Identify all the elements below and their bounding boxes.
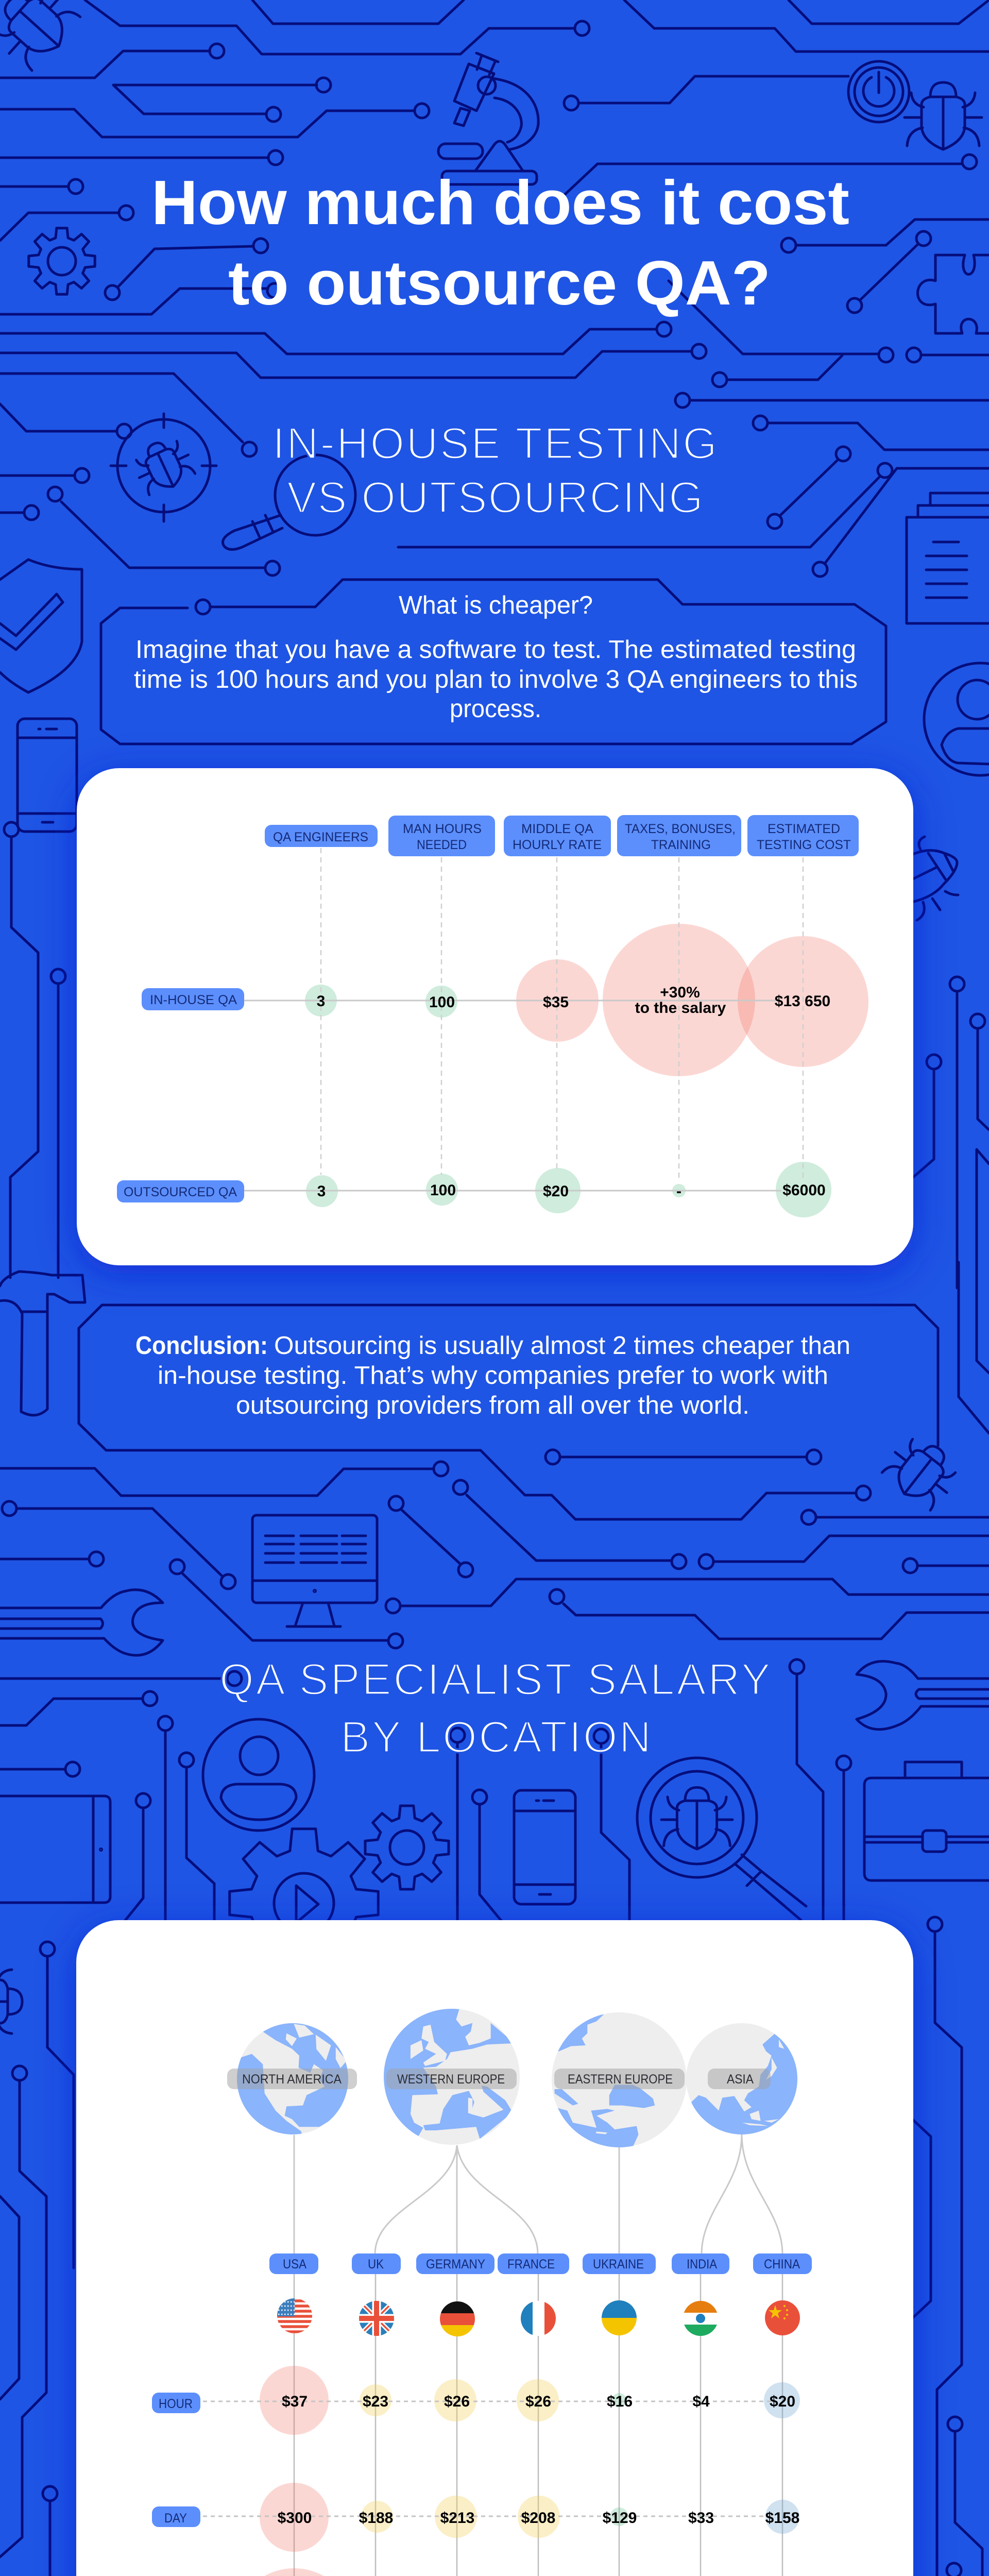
country labels: INDIA xyxy=(687,2257,717,2272)
icon: person right xyxy=(924,663,989,775)
icon: tablet left xyxy=(0,1796,110,1903)
row labels: IN-HOUSE QA xyxy=(150,993,237,1007)
values: day: $129 xyxy=(603,2510,637,2527)
icon: bug top right xyxy=(905,82,982,149)
globe: western europe xyxy=(381,2008,520,2145)
heading: in-house vs outsourcing: IN-HOUSE TESTING xyxy=(272,419,717,468)
values: in-house row: 100 xyxy=(429,994,455,1011)
column headers: QA ENGINEERS xyxy=(273,830,368,844)
flag: usa xyxy=(277,2298,312,2333)
icon: power button xyxy=(848,61,909,122)
icon: shield xyxy=(0,560,82,692)
icon: monitor xyxy=(252,1515,377,1626)
flag: france xyxy=(521,2301,556,2336)
values: day xyxy=(278,2510,799,2527)
column headers: ESTIMATED xyxy=(768,822,840,836)
row labels: hour day week month xyxy=(146,2393,205,2576)
icon: hammer xyxy=(0,1272,85,1415)
icon: magnifier with bug xyxy=(637,1758,806,1920)
values: hour: $20 xyxy=(770,2393,795,2410)
values: outsourced row: $20 xyxy=(543,1183,569,1200)
country labels: UK xyxy=(368,2257,384,2272)
text block: first conclusion: Outsourcing is usually almost 2 times cheaper than xyxy=(274,1332,850,1360)
heading: in-house vs outsourcing: VS OUTSOURCING xyxy=(287,473,703,522)
icon: phone middle xyxy=(514,1790,575,1904)
globe: north america: NORTH AMERICA xyxy=(242,2072,342,2087)
country labels: USA xyxy=(283,2257,306,2272)
text block: what is cheaper: What is cheaper? xyxy=(399,591,593,619)
heading: salary by location: BY LOCATION xyxy=(340,1713,651,1762)
column headers: TRAINING xyxy=(651,838,711,852)
country labels: GERMANY xyxy=(426,2257,485,2272)
panel: testing cost comparison xyxy=(77,768,913,1273)
values: day: $188 xyxy=(359,2510,393,2527)
bubble chart: in-house row xyxy=(305,924,868,1076)
values: outsourced row: - xyxy=(676,1183,681,1200)
values: hour: $26 xyxy=(444,2393,470,2410)
country labels: UKRAINE xyxy=(593,2257,644,2272)
heading: in-house vs outsourcing xyxy=(272,419,717,522)
values: hour: $4 xyxy=(692,2393,710,2410)
flag: china xyxy=(765,2300,800,2335)
row labels: OUTSOURCED QA xyxy=(124,1185,237,1199)
row labels xyxy=(117,988,244,1202)
values: in-house row: to the salary xyxy=(635,999,726,1016)
values: in-house row xyxy=(317,984,830,1016)
dashed row lines xyxy=(203,2401,773,2576)
values: in-house row: $13 650 xyxy=(775,993,830,1010)
icon: microscope xyxy=(438,53,538,184)
text box outline: what is cheaper xyxy=(101,580,886,744)
values: outsourced row xyxy=(317,1182,826,1200)
row labels: hour day week month: DAY xyxy=(164,2511,187,2526)
panel: salary by location xyxy=(76,1920,913,2576)
values: day: $158 xyxy=(765,2510,799,2527)
title: to outsource QA? xyxy=(228,248,771,318)
values: day: $208 xyxy=(521,2510,555,2527)
icon: large gear with play xyxy=(230,1829,378,1977)
icon: magnifier xyxy=(223,455,355,550)
icon: bug right of conclusion xyxy=(878,1429,965,1514)
icon: phone left xyxy=(18,719,77,832)
values: in-house row: +30% xyxy=(660,984,700,1001)
flag: uk xyxy=(359,2301,394,2336)
icon: wrench right xyxy=(857,1661,989,1730)
column headers xyxy=(265,815,859,856)
icon: briefcase xyxy=(864,1762,989,1880)
column headers: TAXES, BONUSES, xyxy=(625,822,736,836)
title: How much does it cost xyxy=(151,167,849,238)
text block: first conclusion: in-house testing. That’s why companies prefer to work with xyxy=(158,1362,828,1389)
values: outsourced row: 3 xyxy=(317,1183,326,1200)
values: outsourced row: $6000 xyxy=(782,1182,826,1199)
icon: small gear xyxy=(365,1806,449,1889)
values: day: $33 xyxy=(688,2510,714,2527)
column headers: TESTING COST xyxy=(757,838,851,852)
flag: germany xyxy=(440,2301,475,2337)
column headers: MAN HOURS xyxy=(403,822,482,836)
values: hour xyxy=(282,2393,795,2410)
country labels: CHINA xyxy=(764,2257,800,2272)
icon: bug top left xyxy=(0,0,84,75)
text block: first conclusion: Conclusion: xyxy=(135,1332,268,1360)
globe: north america xyxy=(227,2020,357,2140)
icon: bug right of card one xyxy=(907,837,958,920)
flag: india xyxy=(683,2301,718,2336)
bubbles: week row xyxy=(233,2568,815,2576)
bubbles: day row xyxy=(260,2483,799,2552)
icon: wrench left xyxy=(0,1590,163,1655)
globe: eastern europe: EASTERN EUROPE xyxy=(568,2072,673,2087)
row labels: hour day week month: HOUR xyxy=(159,2397,193,2411)
icon: gear left xyxy=(29,228,95,294)
heading: salary by location: QA SPECIALIST SALARY xyxy=(219,1655,771,1704)
values: day: $213 xyxy=(440,2510,474,2527)
bubbles: hour row xyxy=(260,2366,800,2435)
text block: what is cheaper xyxy=(134,591,858,723)
icon: person xyxy=(203,1719,314,1831)
vertical column lines xyxy=(294,2274,782,2576)
icon: clipboard xyxy=(907,493,989,623)
icon: bug at left edge xyxy=(0,1963,22,2040)
column headers: HOURLY RATE xyxy=(513,838,602,852)
country labels: FRANCE xyxy=(507,2257,555,2272)
values: hour: $16 xyxy=(607,2393,633,2410)
icon: puzzle piece xyxy=(917,255,989,333)
column headers: MIDDLE QA xyxy=(521,822,593,836)
text block: first conclusion: outsourcing providers from all over the world. xyxy=(236,1392,749,1419)
text block: first conclusion xyxy=(135,1332,850,1419)
globe: asia xyxy=(686,2023,803,2138)
heading: salary by location xyxy=(219,1655,771,1762)
column headers: NEEDED xyxy=(417,838,467,852)
values: day: $300 xyxy=(278,2510,312,2527)
connector lines from regions to countries xyxy=(294,2134,782,2254)
globe: eastern europe xyxy=(549,2012,687,2150)
text box outline: first conclusion xyxy=(79,1305,938,1519)
values: in-house row: $35 xyxy=(543,994,569,1011)
flag: ukraine xyxy=(602,2300,637,2335)
text block: what is cheaper: Imagine that you have a software to test. The estimated testing xyxy=(135,636,856,664)
values: hour: $23 xyxy=(363,2393,388,2410)
bubble chart: outsourced row xyxy=(306,1162,831,1217)
icon: bug in target xyxy=(111,414,216,521)
values: hour: $26 xyxy=(525,2393,551,2410)
country labels xyxy=(269,2253,812,2274)
globe: asia: ASIA xyxy=(727,2072,754,2087)
values: hour: $37 xyxy=(282,2393,308,2410)
values: outsourced row: 100 xyxy=(430,1182,456,1199)
text block: what is cheaper: process. xyxy=(450,695,541,723)
globe: western europe: WESTERN EUROPE xyxy=(397,2072,505,2087)
title xyxy=(151,167,849,318)
text block: what is cheaper: time is 100 hours and you plan to involve 3 QA engineers to this xyxy=(134,666,858,693)
values: in-house row: 3 xyxy=(317,993,325,1010)
